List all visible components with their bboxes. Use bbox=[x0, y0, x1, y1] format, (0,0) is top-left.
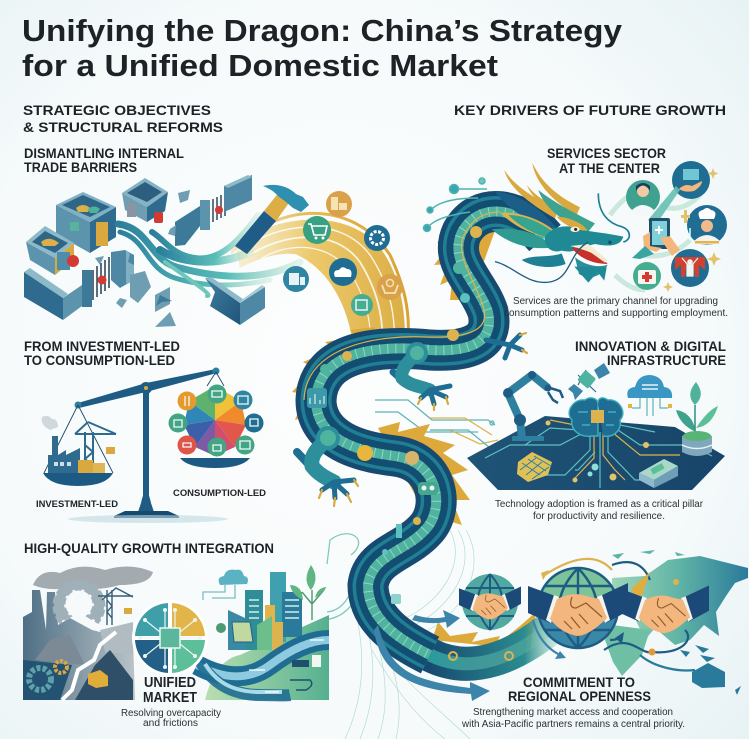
right: new green city bbox=[197, 565, 329, 700]
heading: innovation bbox=[575, 338, 726, 368]
icon: gear bbox=[364, 225, 390, 251]
heading: services sector: SERVICES SECTOR bbox=[547, 145, 666, 161]
circuit lines to tech panel bbox=[320, 400, 498, 620]
dragon leg front bbox=[393, 333, 527, 410]
icon: handshake small bbox=[459, 586, 521, 619]
panel: services sector bbox=[504, 145, 728, 319]
heading: regional openness bbox=[508, 674, 651, 704]
text: regional description: Strengthening market access and cooperation bbox=[473, 707, 673, 718]
icon: first-aid kit bbox=[633, 262, 661, 290]
icon: warehouse large bbox=[56, 192, 116, 253]
icon: delivery truck bbox=[283, 266, 309, 292]
heading: strategic objectives: & STRUCTURAL REFORMS bbox=[23, 119, 223, 135]
heading: regional openness: COMMITMENT TO bbox=[523, 674, 635, 690]
label: investment-led: INVESTMENT-LED bbox=[36, 499, 118, 510]
text: resolving overcapacity: Resolving overcapacity bbox=[121, 708, 221, 719]
title: Unifying the Dragon: China’s Strategy bbox=[22, 13, 623, 48]
heading: innovation: INNOVATION & DIGITAL bbox=[575, 338, 726, 354]
heading: dismantling barriers: TRADE BARRIERS bbox=[24, 159, 137, 175]
icon: warehouse small bbox=[26, 226, 79, 275]
heading: strategic objectives: STRATEGIC OBJECTIVES bbox=[23, 102, 211, 118]
label: unified market: UNIFIED bbox=[144, 675, 196, 691]
heading: investment to consumption: FROM INVESTMENT-LED bbox=[24, 338, 180, 354]
heading: dismantling barriers: DISMANTLING INTERNAL bbox=[24, 145, 184, 161]
wall: lower left with gate bbox=[24, 250, 134, 320]
icon: cloud bbox=[329, 258, 357, 286]
heading: innovation: INFRASTRUCTURE bbox=[607, 352, 726, 368]
panel: investment-led to consumption-led bbox=[24, 338, 266, 523]
panel: innovation and digital infrastructure bbox=[467, 338, 726, 522]
icon: chip grid bbox=[517, 452, 552, 482]
dragon leg rear bbox=[297, 428, 358, 506]
icon: robot arm bbox=[503, 371, 563, 441]
title bbox=[22, 13, 623, 83]
title: for a Unified Domestic Market bbox=[22, 48, 498, 83]
icon: handshake map bbox=[619, 586, 709, 633]
icon: warehouse open bbox=[122, 178, 168, 223]
gold ribbon flow bbox=[232, 213, 408, 345]
heading: services sector bbox=[547, 145, 666, 176]
dragon antenna dots bbox=[424, 178, 487, 232]
icon: box chart bbox=[351, 294, 373, 316]
pan: consumption-led sphere with icons bbox=[168, 384, 264, 468]
icon: chef bbox=[687, 205, 727, 245]
text: services description: consumption patterns and supporting employment. bbox=[504, 308, 728, 319]
label: unified market bbox=[143, 675, 197, 706]
world map bbox=[605, 550, 748, 695]
heading: key drivers: KEY DRIVERS OF FUTURE GROWTH bbox=[454, 102, 726, 118]
globe large bbox=[538, 568, 618, 648]
arrows bbox=[374, 610, 490, 701]
services swooshes bbox=[610, 190, 700, 290]
rubble bbox=[95, 190, 190, 327]
heading: investment to consumption: TO CONSUMPTION-LED bbox=[24, 352, 175, 368]
wall: upper right with gate bbox=[175, 175, 252, 246]
dragon bbox=[292, 163, 629, 664]
icon: hammer bbox=[235, 185, 309, 254]
text: resolving overcapacity bbox=[121, 708, 221, 729]
panel: dismantling internal trade barriers bbox=[24, 145, 403, 327]
panel: high-quality growth integration bbox=[23, 540, 329, 729]
text: services description bbox=[504, 296, 728, 319]
heading: investment to consumption bbox=[24, 338, 180, 368]
icon: plant on database bbox=[676, 382, 718, 456]
heading: high-quality growth: HIGH-QUALITY GROWTH INTEGRATION bbox=[24, 540, 274, 556]
heading: services sector: AT THE CENTER bbox=[559, 160, 660, 176]
circuit board bbox=[467, 416, 725, 490]
icon: server box bbox=[639, 459, 678, 488]
text: technology description: for productivity and resilience. bbox=[533, 511, 665, 522]
text: regional description: with Asia-Pacific partners remains a central priority. bbox=[461, 719, 685, 730]
icon: unified market circle bbox=[132, 600, 208, 676]
left: old industry bbox=[23, 566, 153, 700]
label: unified market: MARKET bbox=[143, 690, 197, 706]
heading: strategic objectives bbox=[23, 102, 223, 135]
globe small bbox=[462, 574, 518, 630]
icon: gold coins bbox=[326, 191, 352, 217]
dragon fins bbox=[292, 196, 536, 650]
text: technology description: Technology adoption is framed as a critical pillar bbox=[495, 499, 704, 510]
text: regional description bbox=[461, 707, 685, 730]
icon: stage performer bbox=[671, 249, 709, 287]
icon: doctor bbox=[626, 180, 660, 215]
wall: lower right block bbox=[205, 277, 265, 325]
panel: commitment to regional openness bbox=[374, 550, 748, 730]
teal data flow bbox=[118, 215, 300, 296]
heading: regional openness: REGIONAL OPENNESS bbox=[508, 688, 651, 704]
decorative threads bbox=[345, 530, 474, 739]
icon: hand with profile card bbox=[648, 161, 710, 226]
icon: satellite bbox=[568, 363, 610, 400]
text: resolving overcapacity: and frictions bbox=[143, 718, 198, 729]
text: services description: Services are the primary channel for upgrading bbox=[513, 296, 718, 307]
dragon body bbox=[304, 211, 562, 664]
icon: shopping cart bbox=[303, 216, 331, 244]
text: technology description bbox=[495, 499, 704, 522]
connection arcs bbox=[533, 559, 695, 670]
icon: cloud bbox=[627, 375, 672, 416]
pan: investment-led factory and crane bbox=[42, 416, 116, 486]
heading: dismantling barriers bbox=[24, 145, 184, 175]
dragon head bbox=[492, 163, 629, 283]
dragon nodes bbox=[307, 226, 513, 660]
icon: gold hands bbox=[377, 274, 403, 300]
sparkles bbox=[663, 168, 721, 292]
icon: ai brain bbox=[569, 398, 623, 436]
balance scale bbox=[44, 368, 228, 523]
icon: handshake large bbox=[528, 583, 628, 636]
icon: tablet in hand bbox=[632, 218, 680, 259]
label: consumption-led: CONSUMPTION-LED bbox=[173, 488, 266, 499]
